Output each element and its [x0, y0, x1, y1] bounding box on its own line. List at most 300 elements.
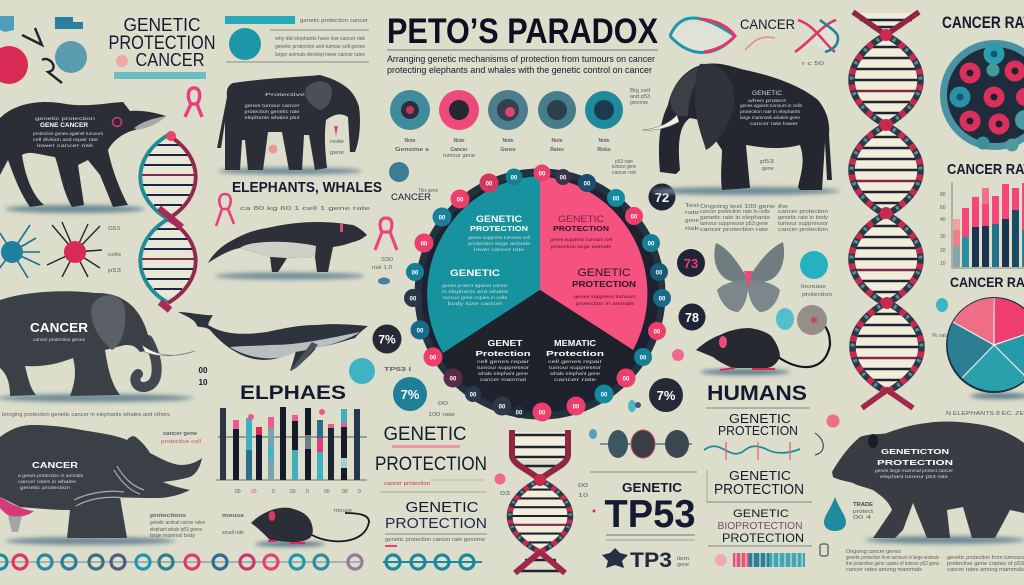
sector text pink [550, 214, 637, 307]
lower feet [515, 552, 565, 573]
cell labels: Cancer [451, 147, 468, 153]
bar chart: vertical sticks: 00 [324, 489, 330, 495]
sector text teal: lower cancer rate [474, 247, 525, 252]
bar chart: vertical sticks: 00 [235, 489, 241, 495]
ring markers: 00 [417, 328, 424, 334]
heading: genetic protection large: GENETIC [384, 424, 466, 445]
sector text pink: PROTECTION [572, 280, 636, 289]
label: tp3 with leaf icon: TP3 [630, 549, 672, 572]
ring markers: 00 [539, 172, 546, 178]
small note under elephant: gene [762, 166, 774, 172]
ring markers: 00 [613, 196, 620, 202]
label: small near ribbon: risk 1.0 [372, 265, 392, 271]
note near 72 [685, 203, 700, 232]
small icon [589, 429, 597, 439]
dna helix centre [510, 430, 570, 573]
grey cell [797, 305, 827, 335]
teal sector [427, 176, 540, 353]
sector text pink: genes suppress tumours cell [550, 237, 612, 243]
animal: elephant top right: GENETIC [752, 90, 782, 97]
bar chart: cancer rates: 20 [940, 248, 946, 254]
caption near pie: N ELEPHANTS 8 EC. ZE [946, 411, 1024, 417]
ring markers: 00 [539, 410, 546, 416]
animal: whale [178, 312, 368, 371]
animal: elephant top middle: Protective [265, 92, 306, 97]
sector text teal: body size cancer [448, 301, 503, 306]
animal: elephant top middle: genes tumour cancer [244, 103, 300, 108]
badge 7% dark [649, 378, 683, 412]
ring markers: 00 [412, 270, 419, 276]
animal: rhino-like mammal: a genes protection in animals [18, 473, 84, 478]
cell labels: Note [502, 138, 514, 144]
barcode strip [715, 553, 805, 567]
ring markers: 00 [499, 404, 506, 410]
label: tp3 with leaf icon: item [677, 556, 689, 562]
heading: genetic protection cancer: PROTECTION [108, 32, 216, 54]
heading: tp53: TP53 [604, 493, 696, 536]
icons near mouse [776, 305, 827, 335]
side badges: 10 [199, 378, 208, 387]
animal: bear right: GENETICTON [881, 447, 949, 456]
badge 78 [678, 304, 706, 330]
belly [240, 242, 316, 258]
sector text pink: PROTECTION [553, 226, 609, 233]
small pink badge [672, 349, 684, 361]
icon: teal fragment [936, 298, 948, 312]
heading: genetic protection cancer: GENETIC [124, 15, 200, 35]
heading: tp53: GENETIC [622, 480, 683, 495]
ear [91, 295, 125, 350]
dna twist left [670, 18, 735, 52]
neck stripes [74, 466, 144, 506]
animal: elephant top middle: elephants whales p53 [244, 115, 300, 120]
text columns under right elephant: cancer protection [778, 227, 828, 233]
elephant head shade [670, 66, 705, 117]
note near icons: p53 rate [615, 159, 633, 165]
sector text dark: cancer rate [554, 377, 597, 382]
ring markers: 00 [573, 404, 580, 410]
text columns under right elephant: cancer protection rate [700, 227, 768, 233]
dna helix right large [852, 12, 922, 408]
panel: genetic protection 2 [707, 468, 812, 502]
sector text teal: genes protect against cancer [442, 283, 509, 288]
heading: genetic protection medium [385, 499, 487, 547]
small notes by elephant: note [330, 139, 344, 145]
notes near rhino: small rate [222, 530, 244, 536]
animal: elephant top right [642, 63, 840, 195]
animal: elephant top middle: protection genetic rate [244, 109, 300, 114]
text columns under right elephant [700, 204, 829, 233]
small notes by elephant: gene [330, 150, 344, 156]
icon row: five cells [390, 90, 623, 159]
icon: pink ribbon middle [216, 194, 234, 226]
icon: small pink face [116, 55, 128, 67]
teal underline bar [114, 72, 206, 79]
ring markers: 00 [511, 176, 518, 182]
animal: bear right: elephant tumour p53 rate [880, 474, 949, 479]
icon: pink ribbon [185, 88, 202, 117]
ring markers: 00 [623, 376, 630, 382]
heading: genetic protection large: PROTECTION [375, 454, 487, 475]
note near drop: TRADE [853, 502, 874, 508]
caption near pie [932, 333, 1024, 417]
cell labels: tumour gene [443, 153, 475, 159]
text columns under right elephant: tumour suppressor [778, 221, 828, 227]
note near drop: protect [853, 509, 874, 515]
ear [695, 64, 734, 150]
label: cancer left of pie [389, 162, 438, 203]
pink ear [340, 224, 343, 232]
animal: elephant top right: protection rate in elephants [740, 109, 801, 114]
animal: tapir top left: cell division and repair rate [33, 137, 99, 142]
pink stroke [392, 445, 460, 448]
animal: tapir top left: genetic protection [35, 116, 96, 121]
sector text teal [442, 214, 531, 306]
animal: elephant top right: cancer rate lower [750, 121, 799, 126]
sector text teal: genes suppress tumours cell [468, 235, 530, 240]
helix top cap [853, 12, 919, 35]
badge 7% left dark [372, 324, 402, 354]
ring markers: 00 [486, 182, 493, 188]
notes near rhino: large mammal body [150, 533, 196, 539]
sector text pink: genes suppress tumours [574, 294, 637, 300]
blue cell spider [0, 225, 40, 278]
animal: tapir top left: GENE CANCER [40, 122, 88, 129]
icons beside centre dna [494, 474, 596, 512]
animal: elephant top right: genes against tumours in cells [740, 103, 803, 108]
tusk [642, 115, 679, 130]
small note under elephant: p53 [760, 159, 774, 165]
side badges [199, 366, 208, 387]
pink cap [166, 131, 176, 141]
label tp53 small: TP53 l [384, 367, 412, 373]
bar chart: cancer rates: 10 [940, 261, 946, 267]
pink sector [540, 176, 647, 350]
panel: genetic protection 3: PROTECTION [722, 531, 804, 545]
sector text dark: whale elephant gene [550, 371, 601, 376]
dark sector [443, 290, 633, 400]
text columns under right elephant: Ongoing text 100 gene [700, 204, 775, 210]
icons beside centre dna: 03 [500, 491, 510, 497]
ring markers: 00 [584, 182, 591, 188]
notes near rhino: genetic animal cancer rates [150, 520, 205, 526]
bar chart: vertical sticks: 00 [290, 489, 296, 495]
animal: rhino-like mammal: genetic protection [20, 485, 71, 490]
text columns bottom right: Ongoing cancer genes [846, 549, 902, 555]
note near 72: gene [685, 218, 699, 224]
elephant ear [305, 81, 332, 110]
sector text dark: tumour suppressor [549, 365, 602, 370]
badge 72 [648, 184, 676, 210]
panel: genetic protection 3: GENETIC [733, 508, 789, 520]
text columns bottom right: genetic protection from tumours [947, 555, 1024, 561]
badge 73: 73 [684, 256, 698, 271]
animal: elephant top right: large mammals whales gene [740, 115, 800, 120]
panel: genetic protection 2: PROTECTION [714, 481, 804, 498]
animal: tapir top left: lower cancer risk [37, 143, 94, 148]
note near badges [428, 401, 455, 418]
sector text dark: cell genes repair [477, 359, 530, 364]
chain bottom left [0, 555, 362, 569]
ring markers: 00 [640, 356, 647, 362]
note near 72: rate [685, 210, 699, 216]
text columns bottom right: the protective gene copies of tumour p53 gene [846, 561, 939, 567]
text columns under right elephant: cancer protection rate in cells [700, 209, 771, 215]
small badge [820, 544, 828, 556]
animal: rhino-like mammal [0, 425, 202, 545]
ring markers [404, 164, 671, 422]
bar chart: cancer rates [940, 182, 1024, 268]
animal: elephant top right: when protect [748, 98, 787, 103]
label: small near ribbon: 330 [381, 257, 393, 263]
panel: genetic protection 2: GENETIC [729, 468, 791, 483]
heading: elphaes: ELPHAES [240, 383, 346, 404]
text columns under right elephant: genetic rate in elephants [700, 215, 771, 221]
teal mark [628, 400, 636, 412]
text columns bottom right: protective gene copies of p53 [947, 561, 1024, 567]
pink dot [494, 474, 506, 484]
animal: mouse bottom: mouse [334, 508, 352, 514]
icon: pink ribbon right of whale [375, 218, 397, 250]
sector text dark: tumour suppressor [477, 365, 530, 370]
panel: genetic protection wave [704, 408, 840, 460]
label: tp3 with leaf icon: gene [677, 562, 689, 568]
trunk [135, 340, 157, 387]
cell 1 [390, 90, 430, 130]
cell 3 [488, 90, 528, 130]
animal: bear right [832, 422, 1024, 544]
ring markers: 00 [659, 296, 666, 302]
subtitle: protecting elephants and whales with the genetic control on cancer [387, 65, 652, 75]
ring markers: 00 [560, 176, 567, 182]
bar chart: vertical sticks: 00 [251, 489, 257, 495]
small pink marks: cancer protection [384, 481, 430, 487]
note under teal ball: Increase [801, 284, 826, 290]
side badges: 00 [199, 366, 208, 375]
panel: top text block: larger animals develop lower cancer rates [275, 52, 365, 58]
ring markers: 00 [654, 330, 661, 336]
note near icons: Big cell [630, 88, 650, 94]
text columns under right elephant: cancer protection [778, 209, 828, 215]
squiggle connectors [22, 28, 62, 83]
small notes by elephant [268, 126, 344, 156]
ring markers: 00 [516, 410, 523, 416]
note near badges: 100 rate [428, 412, 455, 418]
cell labels: Note [598, 138, 610, 144]
sector text teal: tumour gene copies in cells [443, 295, 508, 300]
text columns bottom right [820, 544, 1024, 573]
cell labels: Risks [597, 147, 611, 153]
notes near rhino: elephant whale tp53 genes [150, 527, 202, 533]
notes near rhino: protections [150, 513, 186, 519]
notes near rhino: mouse [222, 513, 244, 519]
heading: genetic protection cancer: CANCER [136, 50, 204, 70]
bar chart: vertical sticks: 0 [358, 489, 361, 495]
whale fin [290, 342, 318, 371]
heading: genetic protection cancer [108, 15, 216, 79]
notes near rhino: cancer gene [163, 431, 197, 437]
sector text dark: cancer mammal [480, 377, 526, 382]
caption near pie: % rat [932, 333, 947, 339]
ring markers: 00 [450, 376, 457, 382]
sector text pink: GENETIC [578, 267, 631, 279]
note near icons [612, 88, 650, 176]
sector text pink: protection large animals [551, 244, 612, 250]
bars [953, 219, 960, 247]
panel: top text block: genetic protection and tumour cell genes [275, 44, 365, 50]
dna twist right [795, 20, 838, 52]
note near icons: genome [630, 100, 648, 106]
tusk [142, 345, 195, 356]
notes near rhino [150, 431, 244, 539]
heading: genetic protection medium: genetic protection cancer rate genome [385, 537, 485, 543]
cell labels: Note [404, 138, 416, 144]
sector text teal: GENETIC [450, 268, 501, 278]
spiders: cancer cells [0, 222, 122, 278]
pink cell spider [47, 222, 102, 277]
teal heading strip [225, 16, 295, 24]
title: PETO’S PARADOX [387, 12, 659, 51]
mini dna top right [670, 16, 838, 67]
icon: teal pill [349, 358, 375, 384]
ring markers: 00 [631, 214, 638, 220]
note under teal ball: protection [802, 292, 832, 298]
pie slices [953, 298, 994, 345]
subtitle: Arranging genetic mechanisms of protection from tumours on cancer [387, 54, 655, 64]
bar chart: cancer rates: 40 [940, 217, 946, 223]
panel: genetic protection 3: BIOPROTECTION [718, 521, 802, 532]
sector text dark: cell genes repair [548, 359, 603, 364]
text: garbled notes under heading: ca 80 kg 60 1 cell 1 gene rate [240, 206, 370, 212]
red scribble [745, 37, 775, 50]
panel: genetic protection 3 [708, 508, 812, 567]
badge 78: 78 [685, 311, 699, 325]
icon: pink mini ribbon [334, 126, 338, 136]
sector text dark: GENET [488, 339, 523, 348]
animal: bear right: genes large mammal protect cancer [875, 468, 953, 473]
ear [868, 434, 878, 448]
bar chart: vertical sticks [216, 407, 367, 495]
small note under elephant [760, 159, 774, 172]
bar chart: vertical sticks: 0 [306, 489, 309, 495]
badge 7% teal: 7% [401, 387, 420, 402]
snout patch [134, 116, 166, 130]
sector text teal: protection large animals [468, 241, 531, 246]
belly [230, 332, 360, 358]
cells [950, 44, 1024, 152]
label: cancer left of pie: CANCER [391, 192, 431, 203]
heading: elephants, whales: ELEPHANTS, WHALES [232, 179, 382, 196]
note under teal ball [801, 284, 832, 298]
icon: butterfly [714, 242, 784, 312]
cell 2 [439, 90, 479, 130]
icon: small teal bars [55, 17, 83, 29]
animal: elephant top middle [217, 75, 362, 174]
animal: tapir top left [0, 102, 166, 213]
icon: small cell [389, 162, 409, 182]
mini dna top right: r c 50 [802, 61, 824, 67]
sector text dark: whale elephant gene [478, 371, 529, 376]
icon: pink cell [0, 46, 28, 84]
wave [704, 446, 800, 454]
badge 73 [677, 249, 705, 277]
note near icons: cancer risk [612, 170, 636, 176]
cell labels: Rates [550, 147, 564, 153]
text columns bottom right: cancer rates among mammals [846, 567, 923, 573]
text columns bottom right: cancer rates among mammals [947, 567, 1024, 573]
label: tp3 with leaf icon [602, 548, 689, 572]
panel: top text block: why did elephants have low cancer risk [275, 36, 366, 42]
ring markers: 00 [430, 356, 437, 362]
label: cancer left of pie: This gene [418, 188, 438, 194]
spiders: cancer cells: G53 [108, 226, 120, 232]
panel: top text block [225, 16, 369, 62]
heading: humans: HUMANS [707, 382, 807, 405]
badge 7% teal [393, 377, 427, 411]
ring markers: 00 [410, 296, 417, 302]
animal: rhino-like mammal: CANCER [32, 461, 78, 470]
animal: rhino-like mammal: cancer rates in whales [18, 479, 77, 484]
text columns under right elephant: genetic rate in body [778, 215, 829, 221]
dna helix left [140, 131, 196, 310]
bar chart: vertical sticks: 00 [342, 489, 348, 495]
knots [880, 29, 893, 309]
cell labels: Genome s [395, 147, 429, 153]
icon: teal droplet tag [0, 16, 14, 32]
sector text pink: protection in animals [576, 301, 635, 307]
small pink mark [811, 317, 817, 323]
sector text dark [476, 339, 605, 382]
animal: elephant bottom left: cancer protection genes [33, 337, 86, 342]
note near drop: 00 4 [853, 515, 871, 521]
cancer label: CANCER [740, 16, 795, 32]
text columns under right elephant: the [778, 204, 788, 210]
animal: elephant bottom left: CANCER [30, 320, 89, 335]
sector text dark: MEMATIC [554, 339, 596, 348]
ring markers: 00 [601, 392, 608, 398]
sector text dark: Protection [546, 349, 605, 358]
note near drop [853, 502, 874, 521]
animal: tapir top left: protective genes against tumours [33, 131, 104, 136]
badge 72: 72 [655, 190, 669, 205]
panel: genetic protection wave: PROTECTION [718, 424, 798, 438]
badge 7% dark: 7% [657, 388, 676, 403]
panel: tp53 icons [589, 400, 697, 472]
text columns under right elephant: tumour suppressor p53 gene [700, 221, 768, 227]
ring markers: 00 [648, 242, 655, 248]
teal capsule [776, 308, 794, 330]
butterfly body [744, 271, 753, 287]
ring markers: 00 [457, 198, 464, 204]
animal: elephant bottom left [0, 291, 195, 402]
animal: mouse bottom [251, 508, 369, 546]
bar chart: cancer rates: 80 [940, 192, 946, 198]
text columns bottom right: genetic protection from tumours in large animals [846, 555, 939, 561]
note near 72: risk [685, 226, 700, 232]
ring markers: 00 [656, 270, 663, 276]
icon: small pink figure [268, 144, 278, 154]
spiders: cancer cells: p53 [108, 268, 121, 274]
cell 5 [585, 91, 623, 129]
upper rungs [512, 430, 568, 480]
heading: genetic protection medium: PROTECTION [385, 515, 487, 532]
icons beside centre dna: 00 [578, 483, 588, 489]
icon: teal round [229, 28, 261, 60]
icon: water drop [824, 497, 846, 531]
badge 7% left dark: 7% [378, 332, 396, 346]
panel: top text block: genetic protection cancer [300, 18, 368, 24]
sector text teal: PROTECTION [470, 226, 528, 233]
